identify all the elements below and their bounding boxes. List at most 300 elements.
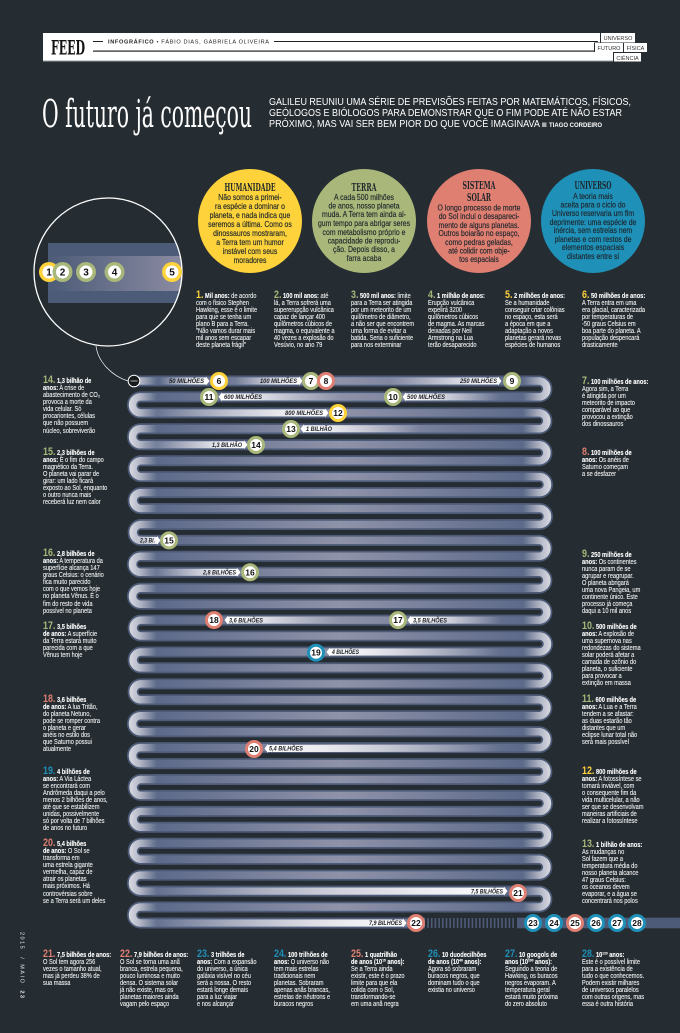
caption 4: quilômetros cúbicos (428, 314, 478, 321)
caption 13: os oceanos devem (582, 884, 630, 891)
caption 1: com o físico Stephen (196, 300, 249, 307)
panel: universo: inércia, sem estrelas nem (554, 225, 632, 235)
marker 14: 14 (251, 440, 261, 450)
panel: terra: farra acaba (347, 253, 382, 263)
serpentine timeline tube (132, 381, 548, 923)
caption 18: atualmente (43, 746, 71, 753)
time label: 4 bilhões (326, 647, 500, 656)
caption 8: Saturno começam (582, 464, 628, 471)
panel: terra: de anos, nosso planeta (328, 201, 400, 211)
caption 4: Armstrong na Lua (428, 335, 473, 342)
marker 17 (389, 611, 407, 629)
caption 2: magma, o equivalente a (274, 328, 335, 335)
caption 7: meteorito de impacto (582, 400, 635, 407)
caption 26 (428, 948, 486, 994)
caption 14: provoca a morte da (43, 399, 92, 406)
marker 8: 8 (324, 376, 329, 386)
marker 1: 1 (46, 268, 52, 278)
marker 15: 15 (164, 535, 174, 545)
caption 19: 19. 4 bilhões de (43, 764, 90, 776)
caption 20 (43, 837, 106, 905)
caption 12: tornará inviável, com (582, 783, 634, 790)
caption 22: densa. O sistema solar (120, 980, 178, 987)
caption 18: que Saturno possui (43, 739, 92, 746)
caption 20: 20. 5,4 bilhões (43, 837, 86, 849)
marker 2: 2 (60, 268, 66, 278)
caption 5: adaptação a novos (505, 328, 553, 335)
tag: universo (601, 33, 635, 42)
caption 5 (505, 288, 565, 349)
caption 17: 17. 3,5 bilhões (43, 620, 86, 632)
caption 11: tendem a se afastar: (582, 711, 634, 718)
panel: sistema solar: Outros boiarão no espaço, (438, 228, 520, 238)
caption 12 (582, 764, 644, 825)
marker 10: 10 (388, 392, 398, 402)
panel: universo: UNIVERSO (574, 179, 612, 192)
caption 22: vagam pelo espaço (120, 1001, 169, 1008)
caption 21: mas já perdeu 38% de (43, 973, 100, 980)
caption 23: anos: Com a expansão (197, 959, 257, 966)
tag: universo: UNIVERSO (604, 36, 633, 42)
caption 5: espécies de humanos (505, 342, 560, 349)
far-future stretch of the timeline (428, 918, 680, 928)
caption 23 (197, 948, 257, 1008)
caption 25: em uma anã negra (351, 1001, 399, 1008)
caption 20: transforma em (43, 855, 80, 862)
caption 5: 5. 2 milhões de anos: (505, 288, 565, 300)
caption 19: se encontrará com (43, 783, 90, 790)
caption 15: o outro nunca mais (43, 492, 91, 499)
marker 14 (247, 436, 265, 454)
caption 15: receberá luz nem calor (43, 499, 101, 506)
caption 24: buracos negros (274, 1001, 313, 1008)
caption 21: 21. 7,5 bilhões de anos: (43, 948, 111, 960)
caption 16: graus Celsius: o cenário (43, 572, 104, 579)
panel: sistema solar: mento de alguns planetas. (439, 220, 519, 230)
caption 21: sua massa (43, 980, 70, 987)
caption 3: batida. Seria o suficiente (351, 335, 413, 342)
caption 9: uma nova Pangeia, um (582, 587, 640, 594)
marker 27: 27 (612, 918, 622, 928)
caption 1: plano B para a Terra. (196, 321, 249, 328)
caption 7: provocou a extinção (582, 414, 633, 421)
time label: 2,8 bilhões (150, 568, 240, 577)
caption 20: mais próximos. Há (43, 883, 90, 890)
caption 16: fica muito parecido (43, 579, 91, 586)
panel: sistema solar: O longo processo de morte (438, 203, 520, 213)
caption 13: As mudanças no (582, 849, 624, 856)
caption 13: Sol fazem que a (582, 856, 623, 863)
caption 14: abastecimento de CO₂ (43, 392, 100, 399)
caption 10: planeta, o suficiente (582, 666, 632, 673)
marker 28: 28 (632, 918, 642, 928)
marker 7 (302, 372, 320, 390)
marker 19 (307, 644, 325, 662)
marker 21 (509, 884, 527, 902)
marker 16: 16 (245, 567, 255, 577)
caption 24: apenas anãs brancas, (274, 987, 330, 994)
caption 15: exposto ao Sol, enquanto (43, 485, 107, 492)
caption 9: nunca param de se (582, 566, 631, 573)
tag: física (624, 43, 647, 52)
panel: terra (312, 169, 416, 273)
caption 12: o consequente fim da (582, 790, 636, 797)
marker 8 (317, 372, 335, 390)
caption 25: existir, este é o prazo (351, 973, 405, 980)
caption 18: anéis no estilo dos (43, 732, 90, 739)
caption 7: comparável ao que (582, 407, 630, 414)
time label: 250 milhões (390, 376, 502, 386)
time label: 250 milhões: 250 MILHÕES (459, 376, 498, 385)
caption 2 (274, 288, 335, 349)
intro text: PRÓXIMO, MAS VAI SER BEM PIOR DO QUE VOCÊ IMAGINAVA (269, 117, 540, 130)
caption 6: população despencará (582, 335, 639, 342)
marker 26 (587, 914, 605, 932)
caption 10: extinção em massa (582, 680, 631, 687)
caption 17: da Terra estará muito (43, 638, 96, 645)
time label: 3,5 bilhões: 3,5 BILHÕES (413, 615, 448, 624)
caption 1: deste planeta frágil" (196, 342, 246, 349)
caption 24: 24. 100 trilhões de (274, 948, 328, 960)
time label: 1 bilhão: 1 BILHÃO (306, 424, 332, 433)
marker 28 (628, 914, 646, 932)
caption 6: -50 graus Celsius em (582, 321, 636, 328)
caption 15: anos: É o fim do campo (43, 457, 104, 464)
caption 3: 3. 500 mil anos: limite (351, 288, 411, 300)
marker 2 (52, 262, 72, 282)
caption 15: 15. 2,3 bilhões de (43, 446, 94, 458)
panel: sistema solar: SOLAR (467, 191, 491, 204)
panel: humanidade: planeta, e nada indica que (210, 210, 290, 220)
intro text (269, 95, 631, 130)
caption 17: de anos: A superfície (43, 631, 97, 638)
marker 22: 22 (411, 918, 421, 928)
caption 14: procariontes, células (43, 413, 95, 420)
marker 18 (205, 611, 223, 629)
caption 3 (351, 288, 414, 349)
caption 9: agrupar e reagrupar. (582, 573, 634, 580)
tag: física: FÍSICA (627, 45, 645, 52)
caption 14: vida celular. Só (43, 406, 81, 413)
time label: 3,6 bilhões: 3,6 BILHÕES (229, 615, 264, 624)
caption 22: branca, estrela pequena, (120, 966, 183, 973)
caption 26: dominam tudo o que (428, 980, 480, 987)
panel: humanidade: instável com seus (223, 246, 278, 256)
caption 14 (43, 374, 100, 435)
caption 13: nosso planeta alcance (582, 870, 638, 877)
caption 27: 27. 10 googols de (505, 948, 557, 960)
time label: 50 milhões (160, 376, 210, 386)
caption 18: 18. 3,6 bilhões (43, 692, 86, 704)
time label: 5,4 bilhões (264, 744, 500, 753)
caption 19 (42, 764, 108, 832)
panel: universo: A teoria mais (573, 191, 613, 201)
caption 28: 28. 10120 anos: (582, 948, 624, 960)
caption 26: buracos negros, que (428, 973, 480, 980)
intro text: GEÓLOGOS E BIÓLOGOS PARA DEMONSTRAR QUE O FIM PODE ATÉ NÃO ESTAR (269, 106, 622, 119)
caption 7: é atingida por um (582, 393, 626, 400)
caption 16: no planeta Vênus. É o (43, 593, 99, 600)
caption 26: 26. 10 duodecilhões (428, 948, 486, 960)
caption 22: 22. 7,9 bilhões de anos: (120, 948, 188, 960)
marker 5: 5 (169, 268, 175, 278)
time label: 2,3 bi.: 2,3 BI. (139, 538, 155, 545)
marker 17: 17 (393, 615, 403, 625)
time label: 3,6 bilhões (224, 615, 340, 625)
caption 27: temperatura geral (505, 987, 550, 994)
caption 10 (582, 620, 641, 687)
marker 27 (608, 914, 626, 932)
panel: sistema solar (427, 169, 531, 273)
caption 12: anos: A fotossíntese se (582, 776, 642, 783)
caption 22 (120, 948, 188, 1008)
panel: humanidade: a Terra tem um humor (216, 237, 284, 247)
caption 13: 47 graus Celsius: (582, 877, 626, 884)
caption 17: Vênus tem hoje (43, 652, 82, 659)
time label: 100 milhões: 100 MILHÕES (260, 376, 298, 385)
marker 25 (566, 914, 584, 932)
caption 6: drasticamente (582, 342, 618, 349)
caption 5: conseguir criar colônias (505, 307, 565, 314)
caption 19: até que se estabilizem (43, 804, 99, 811)
caption 4: 4. 1 milhão de anos: (428, 288, 485, 300)
caption 7: 7. 100 milhões de anos: (582, 374, 648, 386)
caption 28: para a existência de (582, 966, 633, 973)
caption 4: de magma. As marcas (428, 321, 484, 328)
caption 15: girar: um lado ficará (43, 478, 93, 485)
panel: sistema solar: do Sol inclui o desapareci- (439, 211, 520, 221)
caption 19: unidas, possivelmente (43, 811, 99, 818)
caption 27: Hawking, os buracos (505, 973, 558, 980)
caption 28: Este é o possível limite (582, 959, 640, 966)
marker 7: 7 (309, 376, 314, 386)
caption 25: transformando-se (351, 994, 395, 1001)
marker 11: 11 (204, 392, 214, 402)
caption 3: para nos exterminar (351, 342, 401, 349)
caption 9 (582, 548, 640, 615)
caption 15 (43, 446, 108, 506)
time label: 500 milhões (402, 392, 500, 401)
panel: sistema solar: SISTEMA (462, 179, 496, 192)
caption 21: O Sol tem agora 256 (43, 959, 95, 966)
section and credits: INFOGRÁFICO • FÁBIO DIAS, GABRIELA OLIVEIRA (108, 38, 269, 46)
caption 19: anos: A Via Láctea (43, 776, 91, 783)
time label: 7,5 bilhões: 7,5 BILHÕES (471, 886, 504, 895)
caption 11: distantes que um (582, 725, 625, 732)
marker 4: 4 (112, 268, 118, 278)
caption 24 (274, 948, 330, 1008)
caption 3: para a Terra ser atingida (351, 300, 412, 307)
caption 9: 9. 250 milhões de (582, 548, 632, 560)
caption 24: anos: O universo não (274, 959, 329, 966)
caption 4: Erupção vulcânica (428, 300, 474, 307)
timeline start point (128, 375, 140, 387)
time label: 500 milhões: 500 MILHÕES (407, 392, 446, 401)
marker 22 (407, 914, 425, 932)
panel: sistema solar: até colidir com obje- (448, 246, 510, 256)
panel: terra: com metabolismo próprio e (323, 227, 405, 237)
caption 23: do universo, a única (197, 966, 248, 973)
panel: terra: ção. Depois disso, a (333, 244, 396, 254)
caption 28: com outras origens, mas (582, 994, 644, 1001)
panel: universo (541, 169, 645, 273)
caption 11: 11. 600 milhões de (582, 692, 636, 704)
time label: 800 milhões: 800 MILHÕES (285, 408, 324, 417)
marker 3: 3 (83, 268, 89, 278)
caption 5: a época em que a (505, 321, 550, 328)
caption 21 (43, 948, 111, 987)
caption 4: expelirá 3200 (428, 307, 462, 314)
panel: universo: planetas e com restos de (555, 234, 631, 244)
caption 16: superfície alcança 147 (43, 565, 100, 572)
marker 16 (241, 563, 259, 581)
marker 13 (282, 420, 300, 438)
logo: FEED: FEED (51, 36, 85, 60)
caption 12: 12. 800 milhões de (582, 764, 637, 776)
caption 27 (505, 948, 558, 1008)
caption 10: anos: A explosão de (582, 631, 634, 638)
tag: ciência: CIÊNCIA (616, 54, 639, 62)
marker 1 (39, 262, 59, 282)
caption 11: anos: A Lua e a Terra (582, 704, 637, 711)
marker 9 (503, 372, 521, 390)
caption 25: Se a Terra ainda (351, 966, 393, 973)
caption 4: deixadas por Neil (428, 328, 472, 335)
panel: universo: elementos espaciais (562, 242, 624, 252)
marker 11 (200, 388, 218, 406)
caption 25: limite para que ela (351, 980, 397, 987)
caption 1: mil anos sem escapar (196, 335, 251, 342)
caption 2: 2. 100 mil anos: até (274, 288, 328, 300)
caption 3: quilômetro de diâmetro, (351, 314, 411, 321)
caption 13 (582, 838, 642, 905)
caption 27: Seguindo a teoria de (505, 966, 557, 973)
marker 18: 18 (209, 615, 219, 625)
time label: 100 milhões (235, 376, 302, 386)
caption 9: daqui a 10 mil anos (582, 608, 631, 615)
caption 11: eclipse lunar total não (582, 732, 637, 739)
marker 24: 24 (549, 918, 559, 928)
caption 5: planetas gerará novas (505, 335, 561, 342)
marker 5 (162, 262, 182, 282)
panel: humanidade: HUMANIDADE (224, 181, 276, 194)
tag: ciência (614, 53, 641, 62)
panel: universo: deprimente: uma espécie de (550, 217, 636, 227)
caption 25: de anos (1015 anos): (351, 957, 404, 966)
time label: 7,9 bilhões (145, 918, 406, 928)
caption 18: pode se romper contra (43, 718, 100, 725)
caption 2: 40 vezes a explosão do (274, 335, 334, 342)
time label: 600 milhões (218, 392, 340, 401)
marker 4 (104, 262, 124, 282)
caption 7 (582, 374, 648, 428)
panel: humanidade: Não somos a primei- (218, 192, 282, 202)
caption 24: tem mais estrelas (274, 966, 318, 973)
caption 2: Vesúvio, no ano 79 (274, 342, 322, 349)
caption 10: uma supernova nas (582, 638, 632, 645)
caption 7: Agora sim, a Terra (582, 386, 628, 393)
caption 25: 25. 1 quatrilhão (351, 948, 397, 960)
caption 2: capaz de lançar 400 (274, 314, 325, 321)
caption 7: dos dinossauros (582, 421, 623, 428)
panel: terra: TERRA (352, 181, 377, 194)
panel: humanidade: ra espécie a dominar o (215, 201, 285, 211)
caption 10: redondezas do sistema (582, 645, 641, 652)
panel: humanidade: seremos a última. Como os (208, 219, 292, 229)
marker 6 (210, 372, 228, 390)
intro text: GALILEU REUNIU UMA SÉRIE DE PREVISÕES FEITAS POR MATEMÁTICOS, FÍSICOS, (269, 95, 631, 108)
tag: futuro: FUTURO (598, 46, 621, 52)
caption 28: essa é outra história (582, 1001, 633, 1008)
caption 24: estrelas de nêutrons e (274, 994, 330, 1001)
time label: 1 bilhão (300, 424, 420, 433)
time label: 2,3 bi. (136, 536, 160, 545)
time label: 600 milhões: 600 MILHÕES (224, 392, 263, 401)
caption 6: boa parte do planeta. A (582, 328, 641, 335)
marker 25: 25 (570, 918, 580, 928)
caption 23: e nos alcançar (197, 1001, 234, 1008)
caption 2: quilômetros cúbicos de (274, 321, 332, 328)
caption 19: de anos no futuro (43, 825, 87, 832)
caption 13: evaporar, e a água se (582, 891, 637, 898)
marker 12 (329, 404, 347, 422)
caption 17: parecida com a que (43, 645, 93, 652)
caption 16: possível no planeta (43, 608, 92, 615)
caption 28: tudo o que conhecemos. (582, 973, 644, 980)
caption 13: 13. 1 bilhão de anos: (582, 838, 642, 850)
caption 2: lá, a Terra sofrerá uma (274, 300, 331, 307)
caption 17 (43, 620, 97, 659)
caption 5: Se a humanidade (505, 300, 549, 307)
caption 24: planetas. Sobraram (274, 980, 323, 987)
time label: 7,5 bilhões (145, 886, 508, 896)
panel: universo: Universo reservaria um fim (552, 208, 634, 218)
caption 26: existia no universo (428, 987, 475, 994)
time label: 1,3 bilhão: 1,3 BILHÃO (212, 440, 242, 449)
time label: 800 milhões (145, 408, 328, 417)
time label: 5,4 bilhões: 5,4 BILHÕES (269, 744, 304, 753)
caption 6 (582, 288, 646, 349)
caption 9: O planeta abrigará (582, 580, 629, 587)
marker 23: 23 (528, 918, 538, 928)
caption 10: 10. 500 milhões de (582, 620, 637, 632)
caption 12: ser que se desenvolvam (582, 804, 643, 811)
time label: 50 milhões: 50 MILHÕES (169, 376, 205, 385)
caption 27: do zero absoluto (505, 1001, 547, 1008)
caption 1 (196, 288, 257, 349)
marker 20: 20 (249, 744, 259, 754)
caption 15: magnético da Terra. (43, 464, 93, 471)
caption 16: com o que vemos hoje (43, 586, 100, 593)
panel: terra: gum tempo para abrigar seres (318, 218, 410, 228)
caption 18: de anos: A lua Tritão, (43, 704, 98, 711)
caption 11 (582, 692, 637, 746)
marker 3 (76, 262, 96, 282)
caption 26: Agora só sobraram (428, 966, 476, 973)
caption 3: por um meteorito de um (351, 307, 411, 314)
caption 27: negros evaporam. A (505, 980, 556, 987)
caption 21: vezes o tamanho atual, (43, 966, 102, 973)
marker 20 (245, 740, 263, 758)
caption 13: temperatura média do (582, 863, 637, 870)
caption 5: no espaço, esta será (505, 314, 558, 321)
caption 13: concentrará nos polos (582, 898, 638, 905)
caption 12: maneiras artificiais de (582, 811, 637, 818)
panel: humanidade: dinossauros mostraram, (213, 228, 287, 238)
caption 12: realizar a fotossíntese (582, 818, 637, 825)
caption 14: núcleo, sobreviverão (43, 428, 95, 435)
caption 20: controvérsias sobre (43, 891, 92, 898)
